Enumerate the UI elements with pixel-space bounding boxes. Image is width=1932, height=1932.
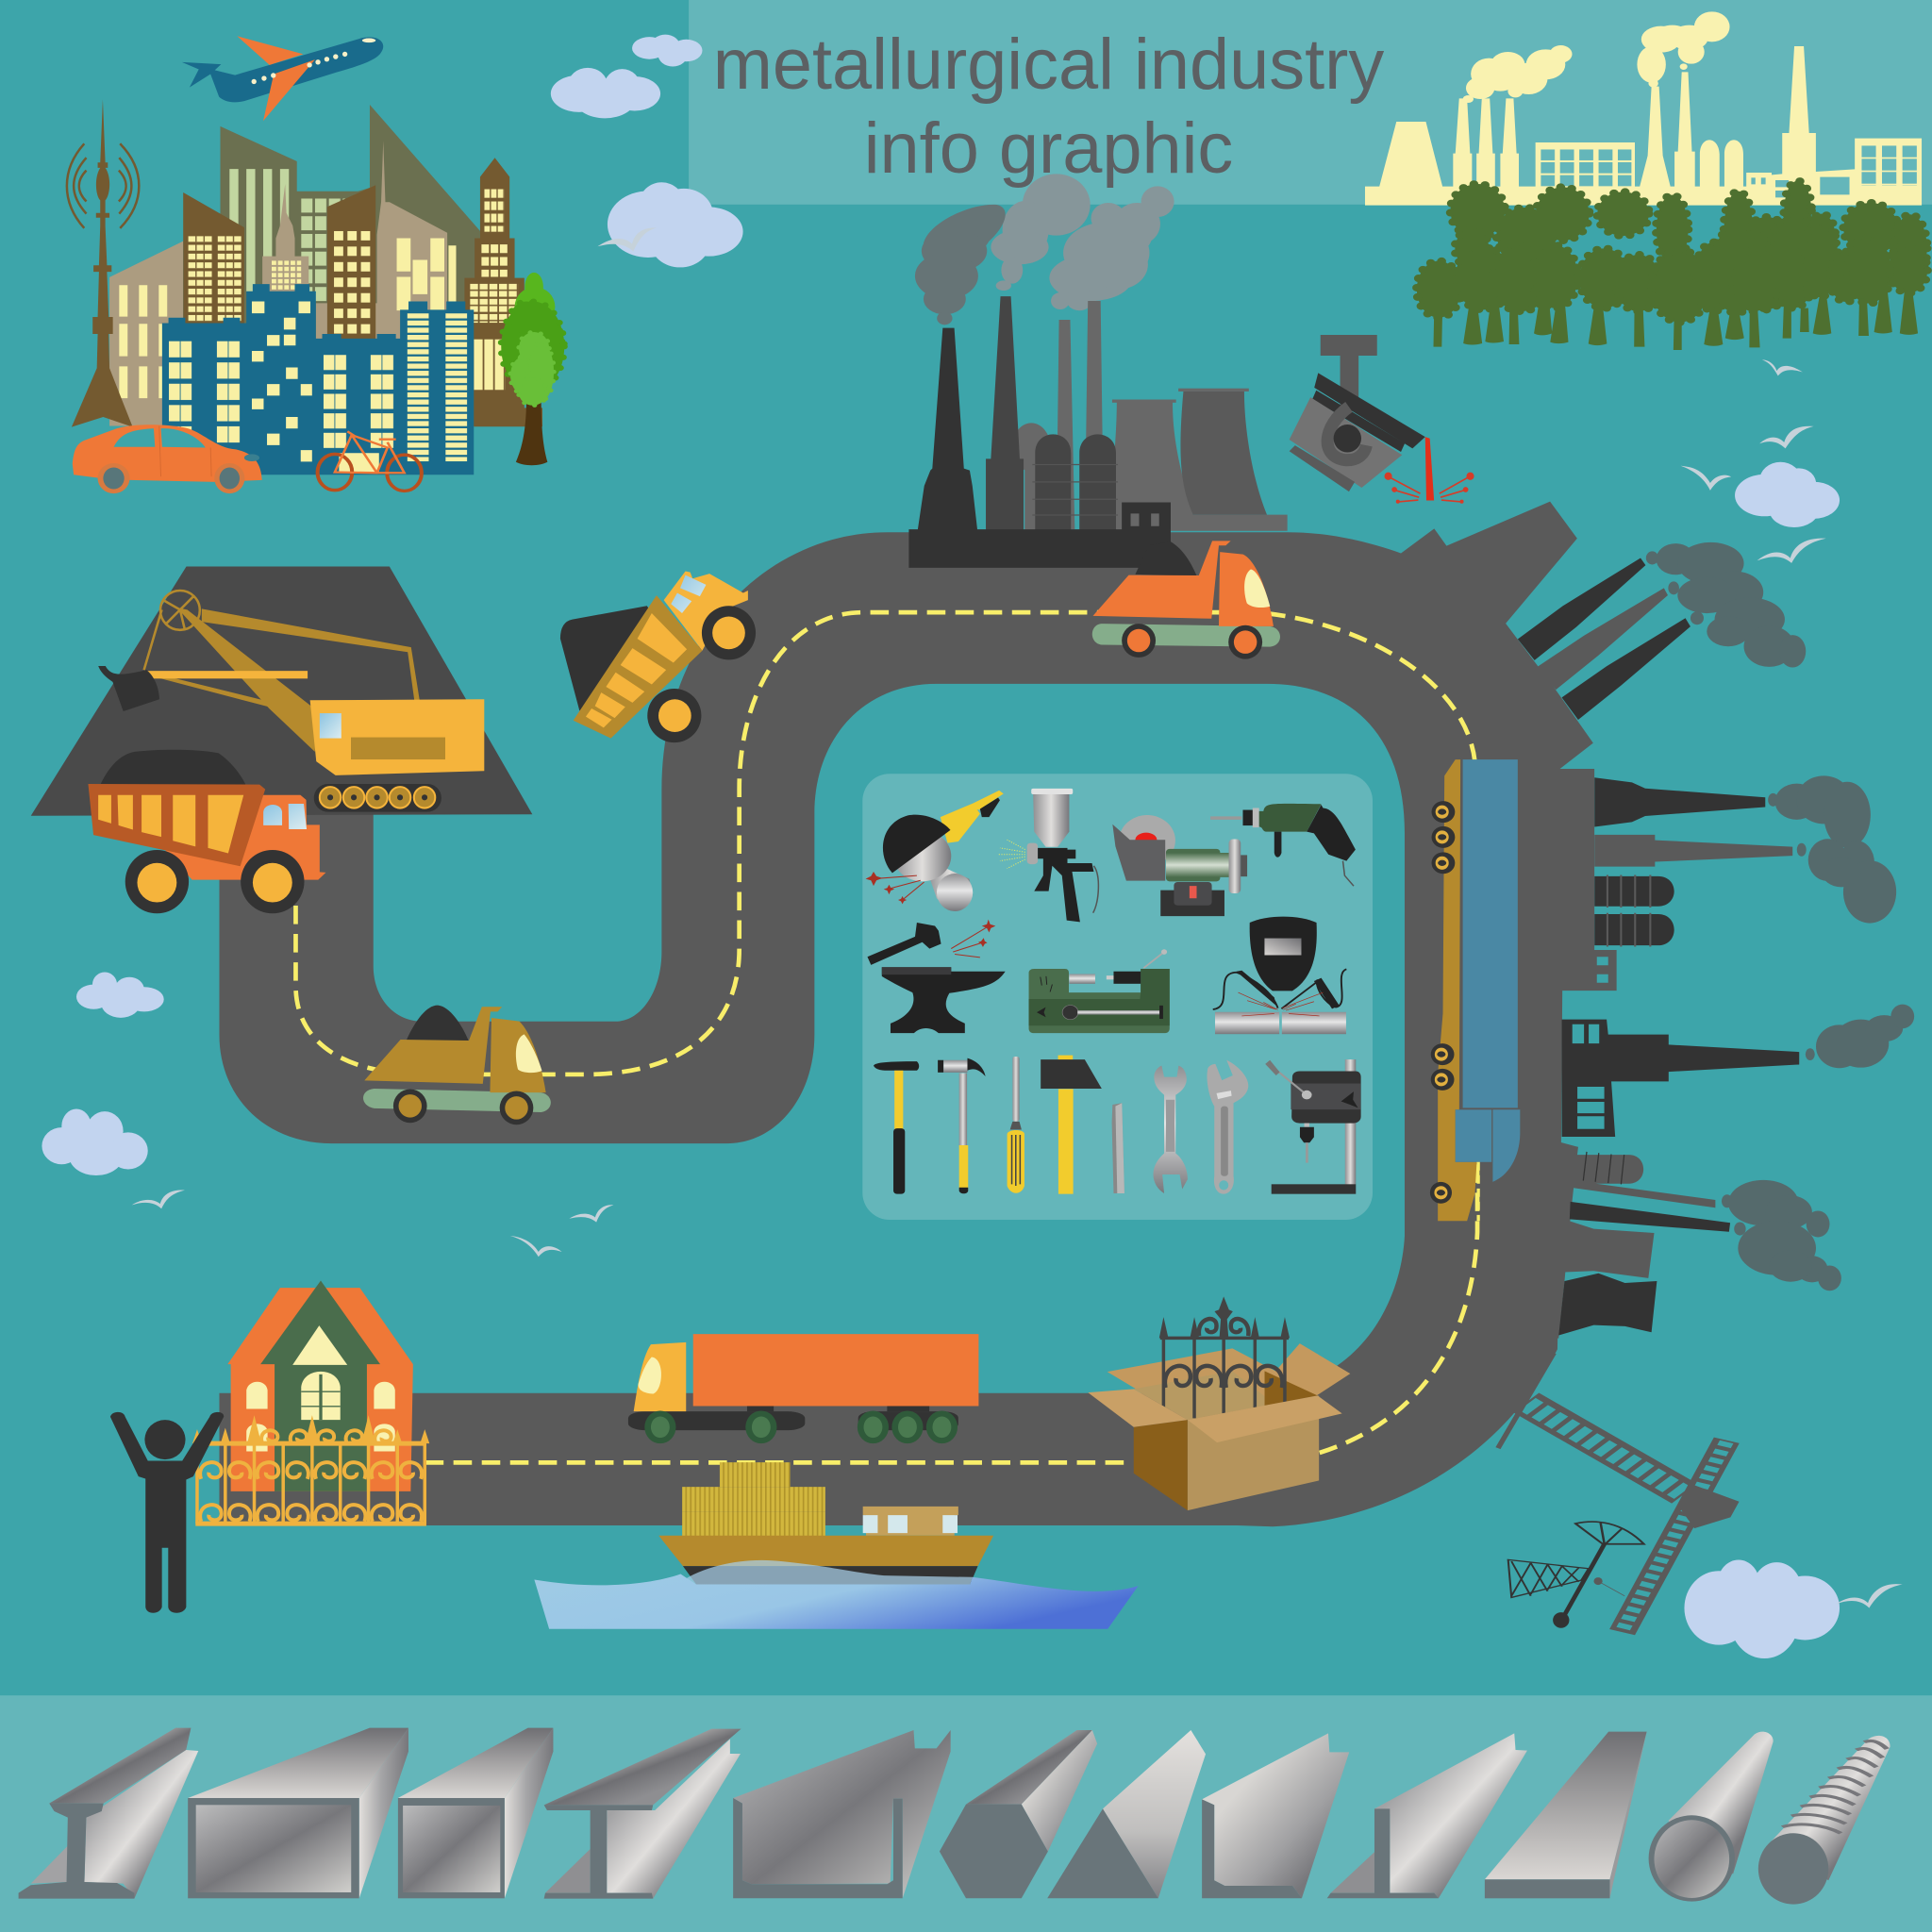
brown towers — [183, 158, 542, 426]
molten ladle — [1290, 335, 1474, 504]
triangle bar — [1047, 1730, 1206, 1898]
cloud 3 — [608, 182, 743, 267]
angle grinder — [866, 791, 1004, 911]
birds — [132, 227, 1903, 1607]
rebar — [1758, 1736, 1890, 1905]
standing person — [110, 1412, 224, 1613]
excavator — [98, 591, 484, 812]
t bar — [1327, 1733, 1527, 1898]
forest — [1417, 181, 1927, 350]
brown dump truck — [363, 1006, 551, 1124]
iron gate — [1159, 1296, 1290, 1418]
cooling towers — [1112, 389, 1288, 531]
flat bar — [1485, 1732, 1647, 1898]
gas tanks — [1594, 875, 1674, 983]
cloud 2 — [632, 35, 702, 67]
hexagon bar — [940, 1730, 1097, 1898]
left side mine and vehicles — [31, 566, 756, 1124]
back olive buildings — [220, 105, 480, 426]
orange ore truck — [88, 750, 325, 913]
cloud 6 — [42, 1109, 148, 1175]
semi truck on road — [1430, 759, 1520, 1221]
i beam — [544, 1729, 741, 1899]
delivery truck — [628, 1334, 978, 1443]
smoke clouds — [1646, 542, 1914, 1291]
tools panel — [862, 774, 1373, 1220]
tools — [866, 789, 1361, 1194]
background stacks — [1057, 301, 1104, 529]
steel products left — [19, 1728, 951, 1899]
cream factory skyline — [1365, 11, 1922, 206]
dark plume — [915, 205, 1006, 325]
dark kiln building — [1562, 1020, 1799, 1137]
electric drill — [1210, 804, 1356, 886]
dark chimneys — [908, 296, 1171, 568]
horizontal chimneys — [1594, 777, 1792, 867]
truss crane — [1495, 1352, 1740, 1632]
tipping yellow truck — [560, 572, 756, 742]
row of hand tools — [874, 1056, 1361, 1194]
steel products panel — [0, 1695, 1932, 1932]
bicycle — [318, 431, 422, 491]
grab on cable — [1508, 1522, 1644, 1628]
top steel plant — [908, 174, 1474, 568]
spray gun — [998, 789, 1098, 922]
angle bar — [1202, 1733, 1349, 1898]
square tube — [398, 1728, 553, 1898]
rail — [19, 1728, 198, 1899]
house — [227, 1280, 413, 1491]
gold fence — [192, 1415, 429, 1524]
airplane — [182, 36, 383, 121]
mini lathe — [1029, 949, 1170, 1033]
right side smokestacks and factories — [1430, 542, 1914, 1339]
orange dump truck — [1092, 541, 1280, 659]
open box with iron gate — [1088, 1296, 1350, 1510]
cloud 1 — [551, 68, 660, 118]
steel products right — [940, 1730, 1890, 1905]
road shoulder — [1551, 1140, 1578, 1339]
grey smoke — [991, 174, 1174, 310]
cargo ship and water — [534, 1462, 1139, 1629]
rectangular tube — [188, 1728, 408, 1898]
cloud 4 — [1735, 462, 1840, 527]
clouds — [42, 35, 1840, 1658]
tree — [501, 273, 564, 465]
round pipe — [1649, 1732, 1774, 1902]
title: info graphic — [864, 108, 1233, 189]
car — [73, 425, 262, 493]
welding mask and pipe — [1213, 917, 1346, 1034]
hammer and sparks over anvil — [867, 920, 1006, 1033]
road centre dashes — [295, 612, 1477, 1462]
road — [219, 502, 1617, 1526]
lower stacks — [1558, 1144, 1730, 1335]
crane arm — [1526, 1403, 1726, 1632]
city illustration — [67, 36, 564, 493]
ore mound — [31, 566, 532, 816]
cloud 7 — [1684, 1560, 1840, 1658]
tv tower — [67, 99, 139, 427]
title: metallurgical industry — [713, 25, 1384, 105]
channel — [733, 1730, 951, 1898]
beige buildings — [109, 141, 456, 426]
bench grinder — [1112, 815, 1247, 916]
title panel — [689, 0, 1932, 205]
green windows — [229, 169, 289, 291]
cloud 5 — [76, 973, 164, 1018]
blue buildings — [162, 284, 474, 475]
angled chimneys — [1518, 558, 1690, 720]
